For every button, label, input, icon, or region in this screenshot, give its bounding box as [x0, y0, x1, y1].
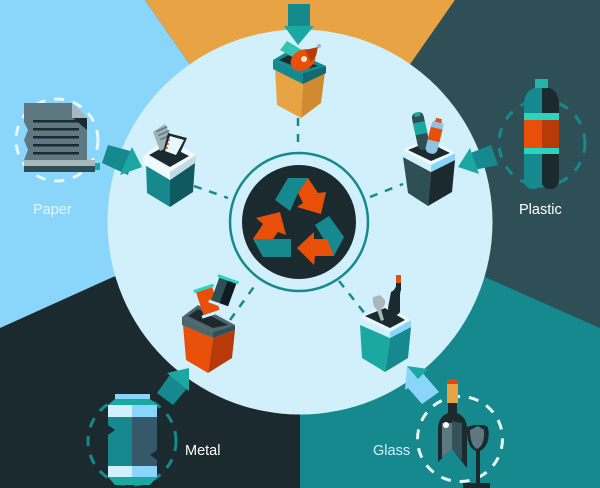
arrow: glass — [405, 366, 439, 404]
bin: metal — [182, 274, 239, 373]
bin: organic (orange) — [273, 41, 326, 118]
label: Metal: Metal — [185, 443, 220, 459]
bin: glass — [359, 275, 411, 372]
icon: plastic dashed ring — [499, 100, 585, 186]
bin: plastic — [403, 111, 455, 206]
icon: organic waste — [280, 41, 321, 75]
panel: plastic — [403, 79, 585, 218]
arrow: into top bin — [284, 4, 314, 45]
icon: paper dashed ring — [16, 99, 98, 181]
arrow: metal — [157, 368, 189, 405]
dashed connectors — [194, 118, 403, 320]
icon: paper stack — [24, 103, 100, 172]
icon: glass dashed ring — [418, 396, 502, 482]
label: Paper: Paper — [33, 202, 72, 218]
panel: glass — [359, 275, 502, 488]
icon: metal can — [108, 394, 157, 485]
label: Glass: Glass — [373, 443, 410, 459]
icon: plastic bottles — [411, 111, 445, 155]
bin: paper — [143, 124, 196, 207]
icon: wine bottle and glass — [438, 379, 490, 488]
icon: plastic bottle — [524, 79, 559, 189]
central light circle — [108, 30, 492, 414]
panel: paper — [16, 99, 196, 218]
panel: metal — [88, 274, 239, 485]
icon: documents — [153, 124, 187, 158]
arrow: paper — [102, 145, 142, 175]
icon: metal dashed ring — [88, 397, 176, 485]
icon: cans — [193, 274, 239, 319]
label: Plastic: Plastic — [519, 202, 562, 218]
icon: bottle and wine glass — [373, 275, 401, 321]
arrow: plastic — [458, 145, 498, 174]
recycling emblem — [230, 153, 368, 291]
